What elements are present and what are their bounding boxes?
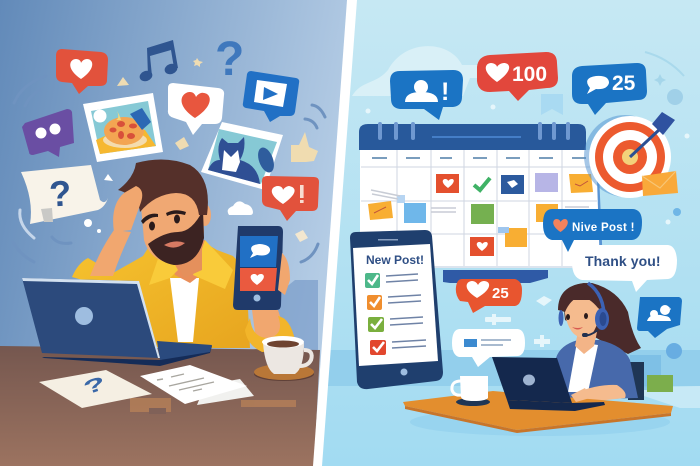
shirt bbox=[72, 240, 250, 348]
laptop: navy bbox=[492, 357, 605, 411]
badge: 25 comments: 25 bbox=[612, 72, 636, 95]
blouse bbox=[568, 342, 598, 392]
face bbox=[140, 183, 204, 264]
coffee cup: white bbox=[452, 376, 490, 406]
bubble: add group icon bbox=[637, 297, 682, 338]
hair bbox=[118, 159, 208, 215]
eyes and smile bbox=[566, 313, 588, 320]
icon: user alert bubble bbox=[390, 70, 463, 120]
laptop: dark blue bbox=[22, 278, 212, 366]
neck bbox=[168, 245, 202, 278]
phone: new post checklist bbox=[350, 230, 443, 389]
badge: 25 comments bbox=[572, 63, 647, 115]
checklist items bbox=[365, 273, 380, 288]
paper with question mark bbox=[39, 370, 152, 408]
arm raised bbox=[90, 230, 131, 276]
decor: motion arcs bbox=[13, 76, 325, 262]
icon: note with question mark: ? bbox=[48, 172, 72, 215]
icon: cat photo bbox=[201, 122, 283, 190]
figure: stressed man bbox=[72, 159, 250, 348]
phone: new post checklist: New Post! bbox=[366, 253, 424, 267]
divider: white slanted band bbox=[313, 0, 357, 466]
decor: blue circle and green box bbox=[630, 343, 682, 392]
hand on head bbox=[113, 186, 142, 232]
hand and cuff bbox=[245, 253, 295, 352]
badge: 100 likes bbox=[477, 52, 558, 101]
hand on laptop bbox=[571, 388, 590, 402]
eyes and brows bbox=[141, 210, 186, 230]
papers: notes bbox=[140, 365, 254, 405]
icon: question mark: ? bbox=[215, 33, 244, 86]
decor: sparkles and dashes bbox=[485, 296, 552, 347]
paper with question mark: ? bbox=[81, 372, 108, 399]
blazer bbox=[556, 340, 638, 400]
desk: brown table bbox=[0, 346, 320, 466]
badge: red 25 likes bbox=[456, 279, 522, 313]
icon: red bubble with heart and exclamation bbox=[262, 176, 319, 221]
decor: faint bookmark, sparkle, dots bbox=[366, 52, 690, 224]
target with arrow and envelope bbox=[584, 112, 678, 198]
icon: thumbs up bbox=[291, 132, 318, 162]
badge: red 25 likes: 25 bbox=[492, 285, 509, 302]
icon: music note bbox=[138, 40, 179, 83]
calendar stickers bbox=[436, 174, 459, 193]
figure: woman with headset bbox=[556, 283, 641, 403]
icon: purple chat bubble bbox=[22, 109, 74, 157]
coffee cup and saucer bbox=[254, 336, 314, 381]
arm bbox=[575, 385, 626, 403]
calendar bbox=[359, 124, 603, 268]
decor: small squares and dots bbox=[84, 174, 308, 242]
icon: red heart bubble bbox=[56, 49, 108, 94]
collar bbox=[149, 240, 233, 289]
badge: 100 likes: 100 bbox=[512, 63, 547, 86]
desk: orange bbox=[403, 391, 673, 436]
icon: white heart bubble bbox=[168, 83, 224, 135]
bubble: Thank you: Thank you! bbox=[585, 253, 661, 269]
chair bbox=[628, 362, 644, 400]
decor: blurry desk smudges bbox=[130, 398, 296, 414]
icon: cloud bbox=[228, 201, 253, 215]
icon: user alert bubble: ! bbox=[441, 78, 449, 106]
icon: note with question mark bbox=[21, 165, 108, 224]
phone: held by man bbox=[233, 226, 283, 310]
bubble: white chat message bbox=[452, 329, 525, 367]
icon: video bubble bbox=[243, 71, 299, 122]
hair back bbox=[563, 283, 641, 354]
face bbox=[564, 300, 599, 338]
decor: star and triangle bbox=[117, 58, 203, 150]
hair front bbox=[558, 283, 603, 312]
panel: organised right background bbox=[310, 0, 700, 466]
headset bbox=[588, 283, 604, 320]
bubble: Nive Post bbox=[543, 209, 642, 252]
tee bbox=[170, 278, 199, 342]
bubble: Nive Post: Nive Post ! bbox=[572, 222, 635, 234]
bubble: Thank you bbox=[572, 245, 677, 292]
panel: chaotic left background bbox=[0, 0, 352, 466]
icon: pizza photo bbox=[83, 93, 163, 162]
calendar bottom shelf bbox=[443, 270, 548, 283]
beard bbox=[148, 210, 204, 265]
neck bbox=[575, 332, 597, 354]
